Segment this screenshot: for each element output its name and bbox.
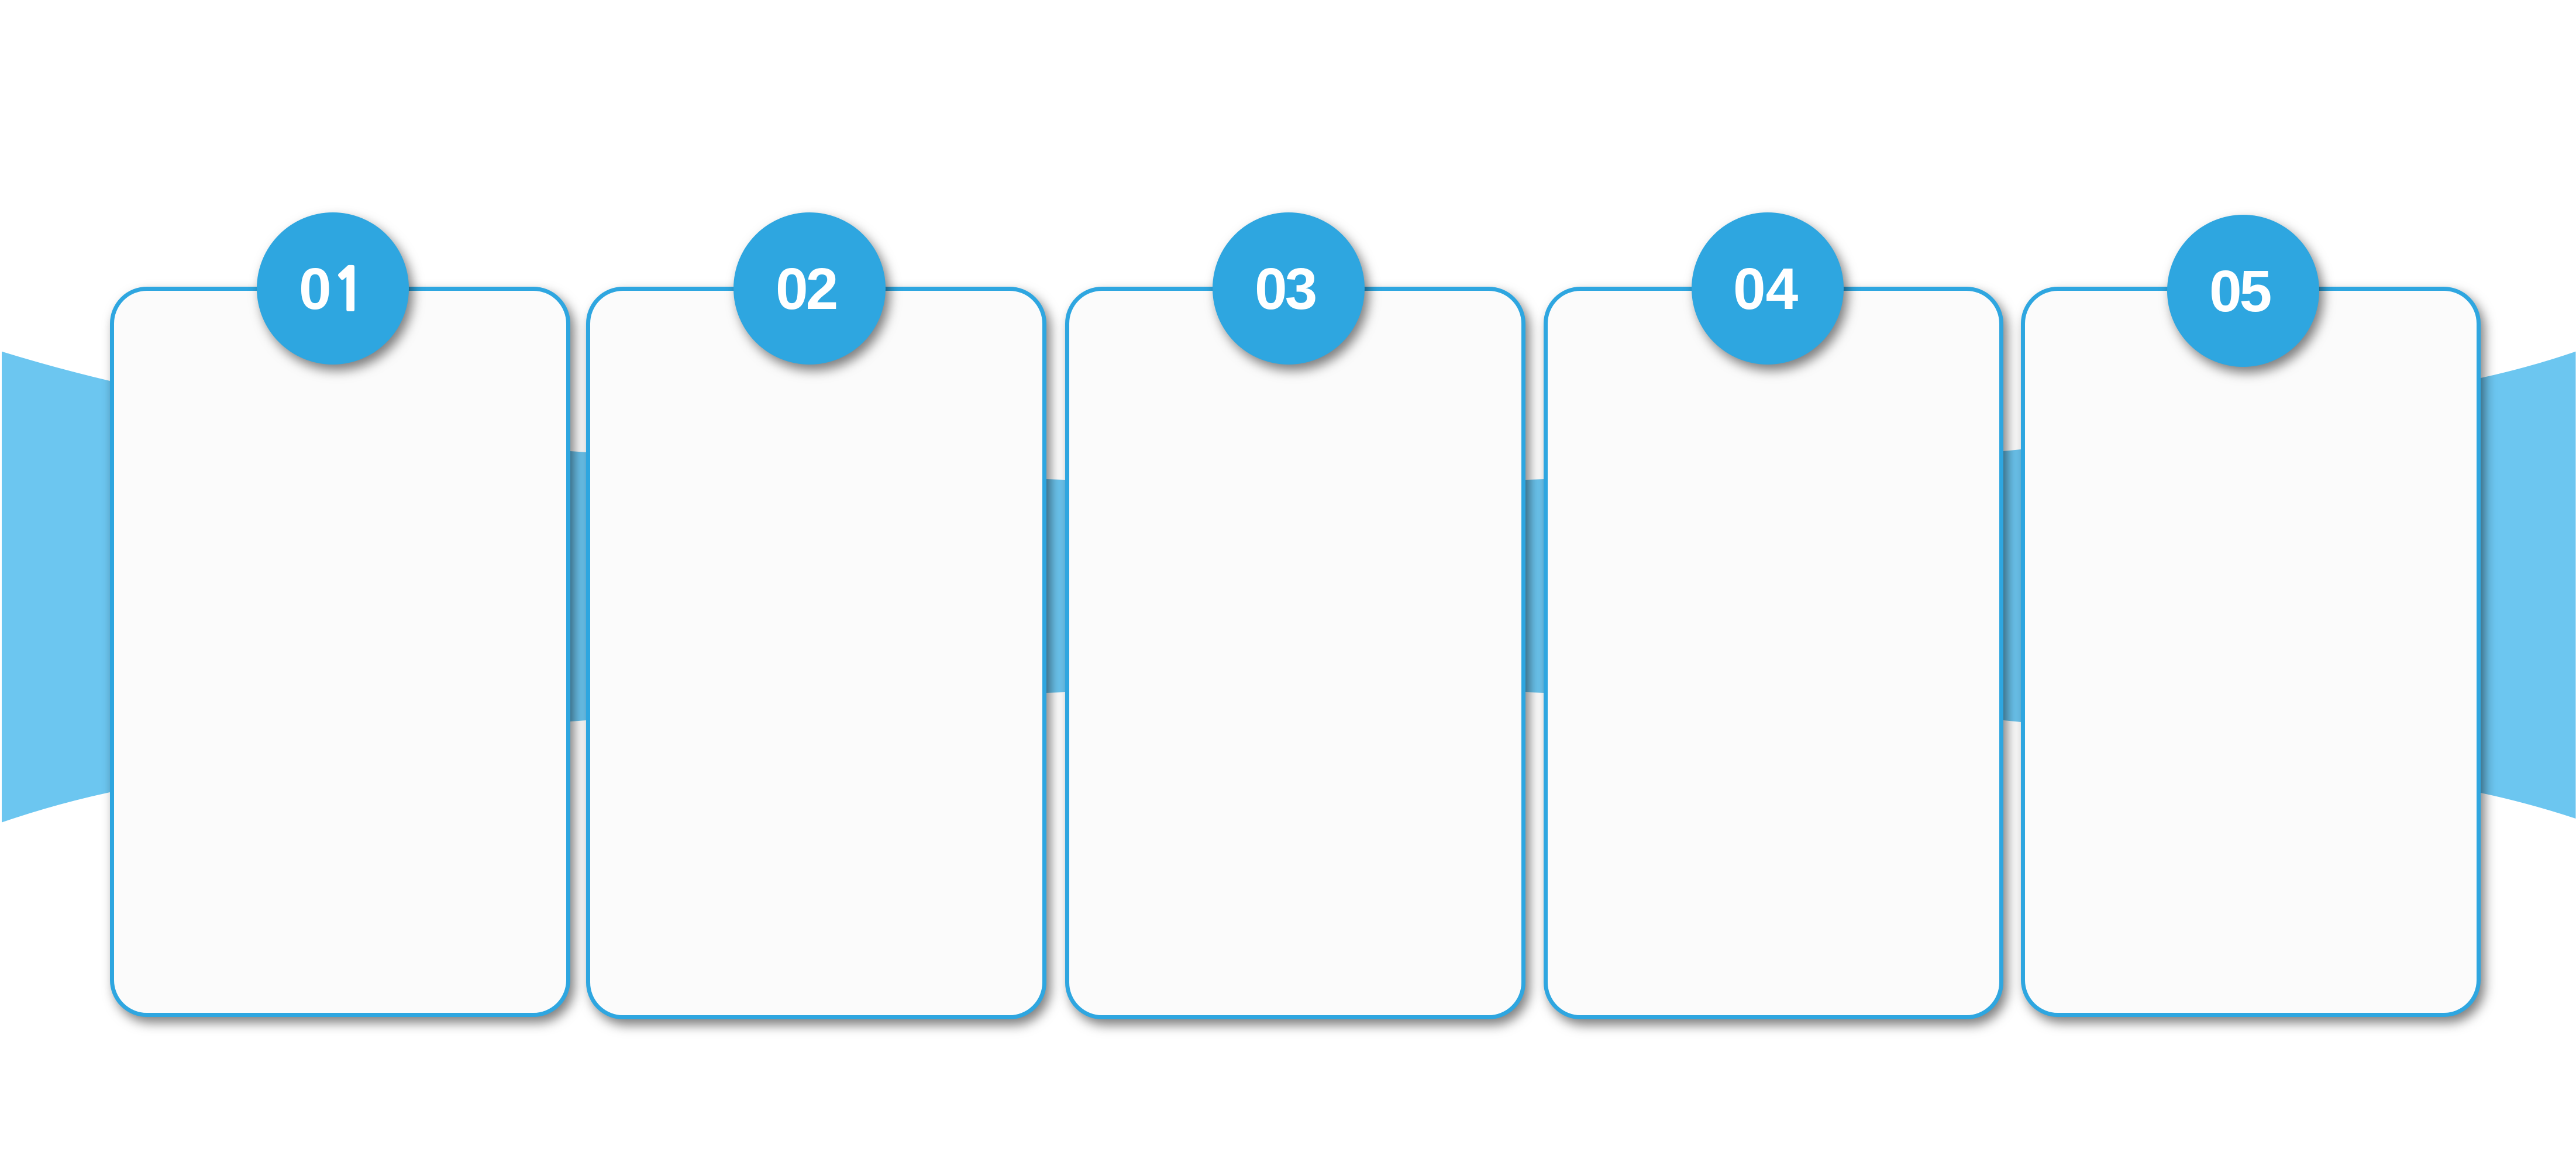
number badge 05: 05	[2209, 259, 2270, 324]
number badge 03	[1213, 212, 1365, 365]
number badge 01	[257, 212, 409, 365]
number badge 03: 03	[1255, 256, 1315, 322]
panel: card 4	[1544, 287, 2003, 1019]
number badge 01: 01	[299, 256, 367, 322]
number badge 05	[2167, 215, 2319, 367]
panel: card 1	[110, 287, 570, 1017]
number badge 04: 04	[1733, 256, 1798, 322]
number badge 02	[733, 212, 886, 365]
number badge 04	[1692, 212, 1844, 365]
panel: card 5	[2021, 287, 2481, 1017]
panel: card 2	[586, 287, 1046, 1019]
number badge 02: 02	[776, 256, 836, 322]
panel: card 3	[1065, 287, 1525, 1019]
